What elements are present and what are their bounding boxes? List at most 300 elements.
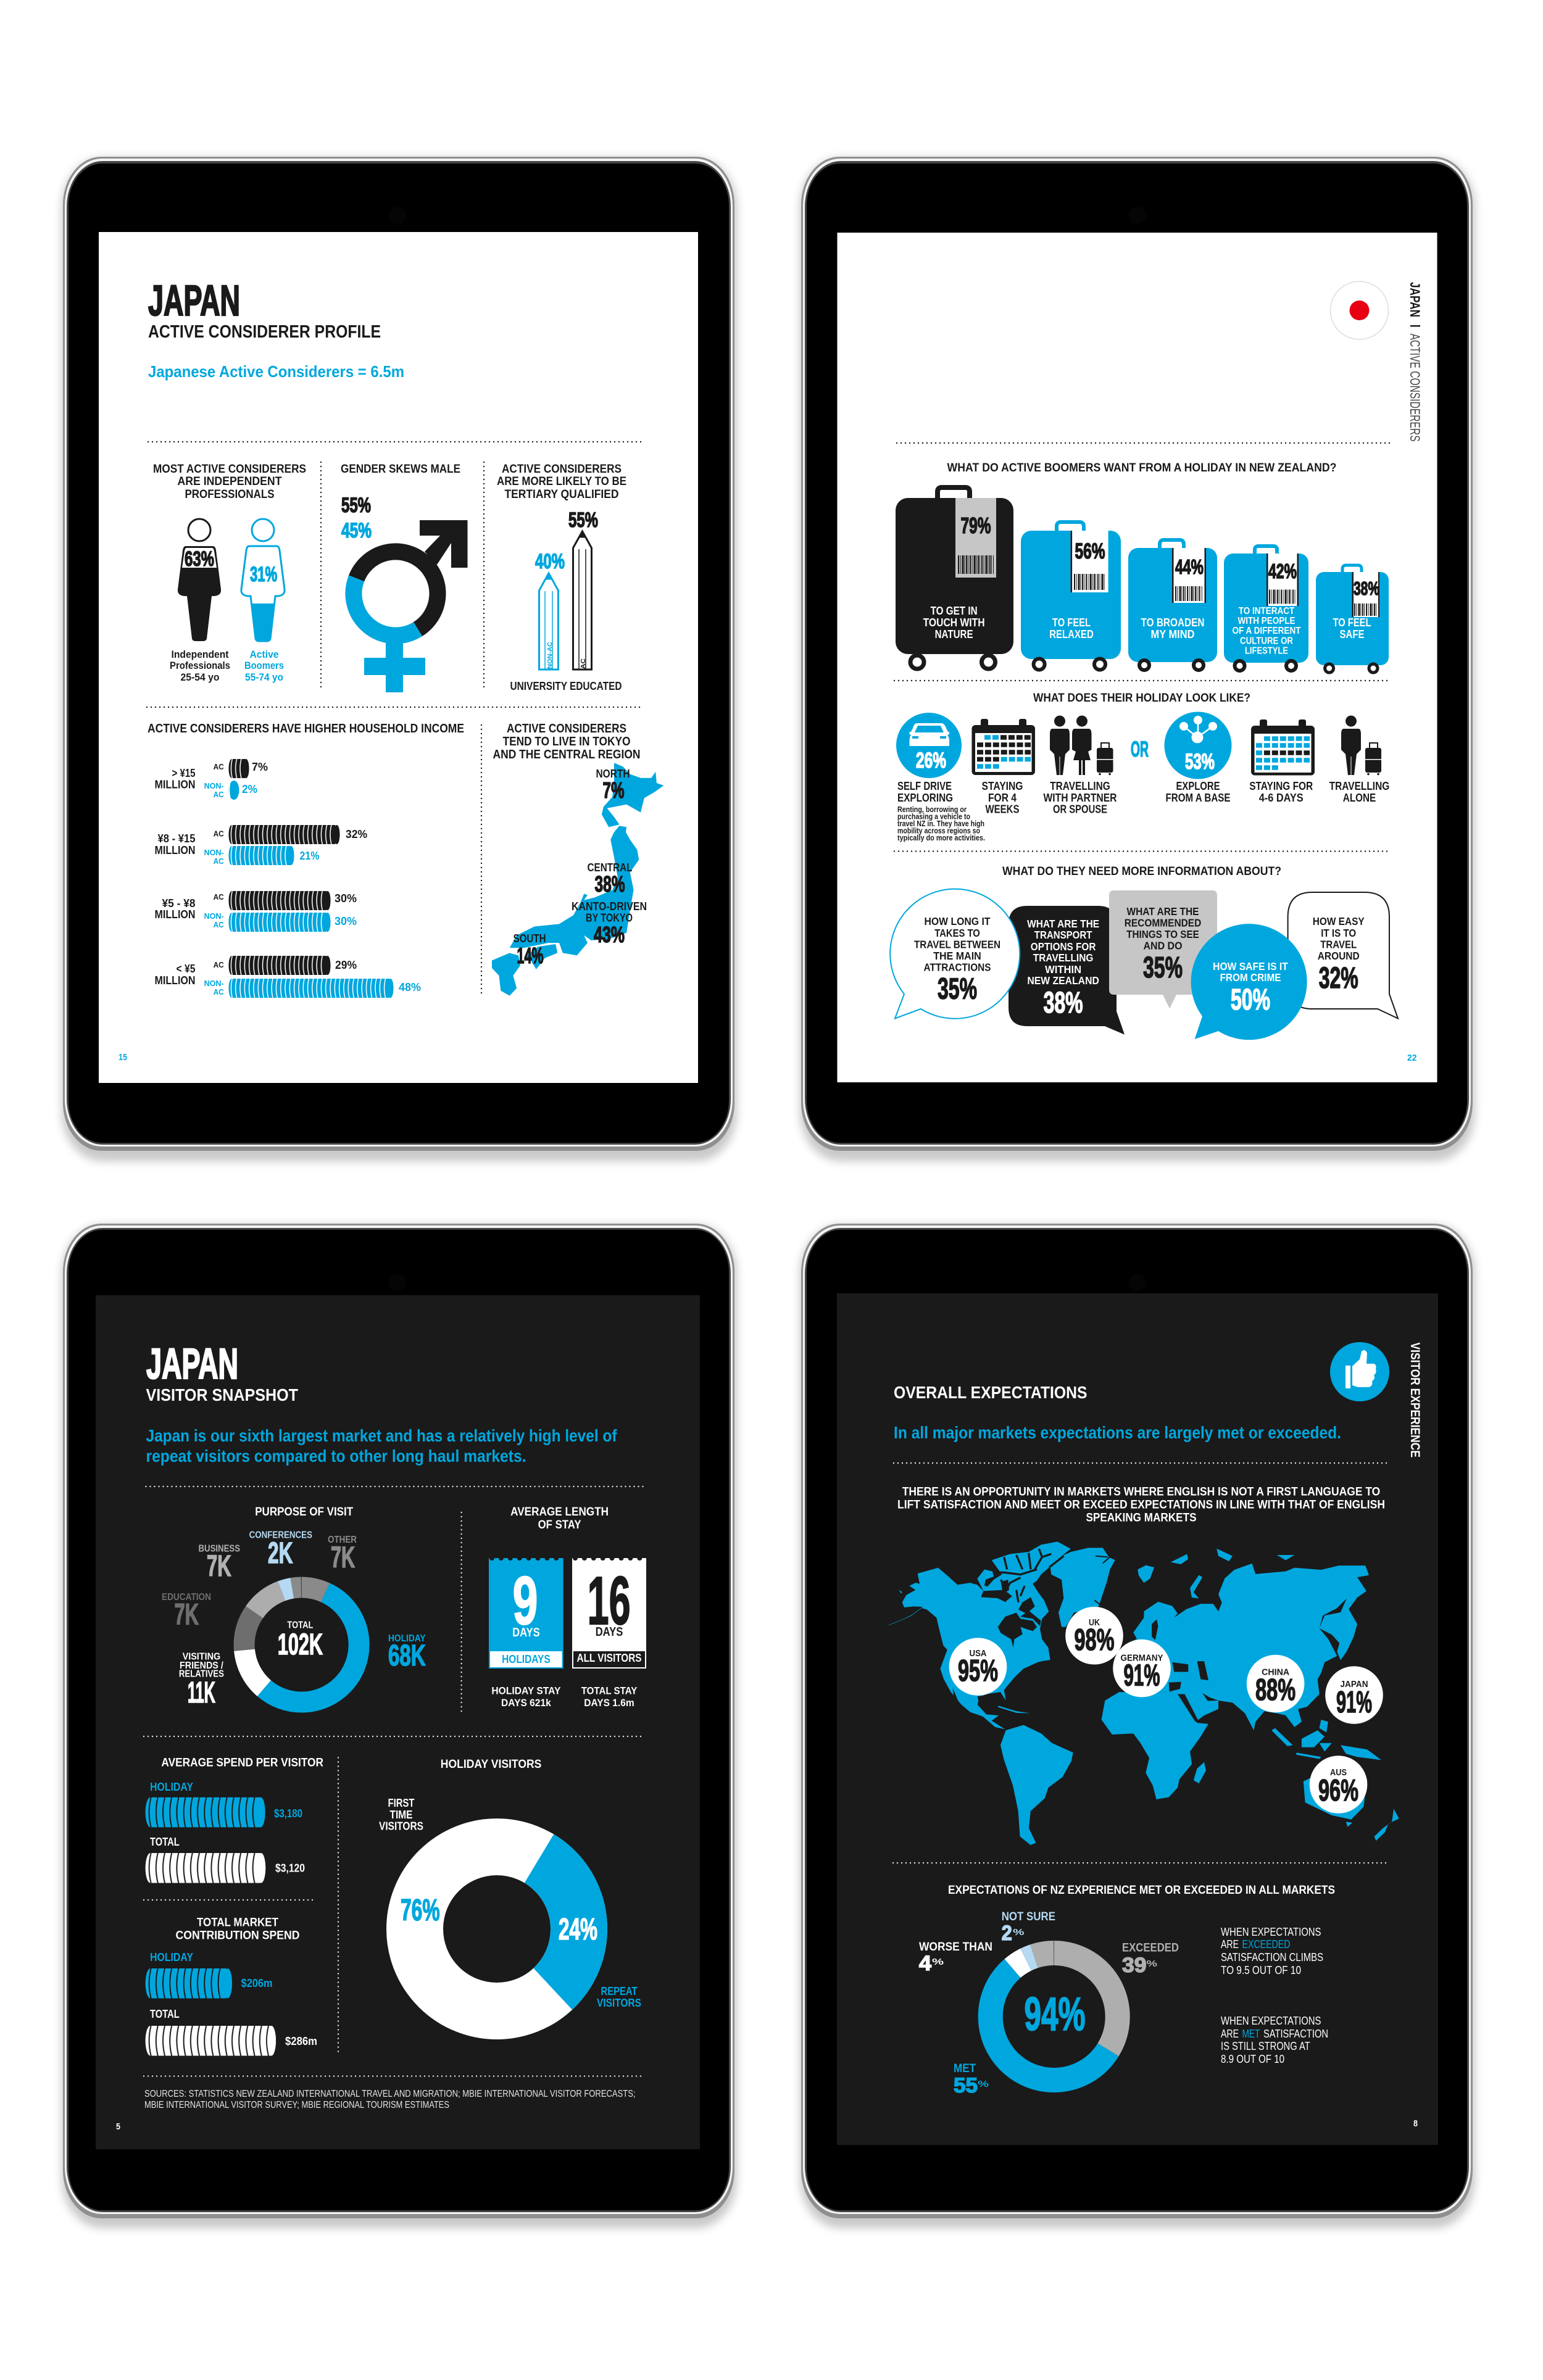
stat: worse than: WORSE THAN bbox=[919, 1941, 992, 1954]
stat: worse than: % bbox=[932, 1957, 944, 1967]
heading: gender: GENDER SKEWS MALE bbox=[341, 462, 460, 476]
speech bubble: transport options 38%: OPTIONS FOR bbox=[1031, 940, 1096, 953]
row: 8 to 15 million bbox=[154, 825, 367, 866]
calendar: holidays 9 days: DAYS bbox=[512, 1626, 540, 1640]
page number: 22 bbox=[1407, 1053, 1417, 1063]
map: Japan bbox=[492, 763, 663, 996]
stat: visiting friends and relatives: RELATIVES bbox=[179, 1669, 224, 1680]
heading: tokyo region: AND THE CENTRAL REGION bbox=[493, 748, 641, 761]
heading: length of stay: OF STAY bbox=[538, 1518, 581, 1532]
label: self drive exploring: typically do more activities. bbox=[897, 834, 985, 842]
stat: 76%: 76% bbox=[401, 1894, 440, 1927]
heading: total market contribution: CONTRIBUTION SPEND bbox=[175, 1929, 300, 1943]
note: exceeded satisfaction: TO 9.5 OUT OF 10 bbox=[1221, 1964, 1301, 1976]
calendar: holidays 9 days bbox=[489, 1558, 564, 1669]
suitcase: safe 38%: 38% bbox=[1354, 578, 1379, 599]
label: active boomers: Active bbox=[249, 649, 279, 660]
suitcase: broaden 44%: MY MIND bbox=[1150, 628, 1195, 641]
row: 8 to 15 million: NON- bbox=[204, 848, 224, 857]
note: met satisfaction: SATISFACTION bbox=[1263, 2028, 1328, 2040]
speech bubble: recommended things 35% bbox=[1109, 890, 1217, 1008]
donut chart: expectations bbox=[991, 1953, 1118, 2080]
note: met satisfaction: MET bbox=[1242, 2028, 1260, 2040]
subtitle: ACTIVE CONSIDERER PROFILE bbox=[148, 322, 381, 342]
icon: self drive car 26%: 26% bbox=[916, 748, 946, 773]
suitcase: interact 42%: OF A DIFFERENT bbox=[1232, 626, 1301, 636]
row: 8 to 15 million: MILLION bbox=[154, 844, 195, 856]
speech bubble: transport options 38%: 38% bbox=[1044, 987, 1083, 1019]
icon: blue pencil: NON-AC bbox=[547, 642, 554, 669]
bar: contribution holiday: $206m bbox=[241, 1977, 273, 1989]
speech bubble: safety 50%: HOW SAFE IS IT bbox=[1213, 960, 1288, 972]
calendar: all visitors 16 days: ALL VISITORS bbox=[576, 1652, 642, 1664]
row: over 15 million: > ¥15 bbox=[172, 767, 195, 779]
label: travelling with partner: OR SPOUSE bbox=[1053, 803, 1107, 816]
label: self drive exploring: Renting, borrowing or bbox=[897, 805, 967, 814]
bar chart: household income bbox=[154, 759, 421, 998]
label: university educated: UNIVERSITY EDUCATED bbox=[510, 680, 622, 692]
marker: Australia: 96% bbox=[1318, 1774, 1358, 1807]
bar: average spend holiday bbox=[146, 1781, 302, 1827]
heading: independent professionals: ARE INDEPENDENT bbox=[178, 475, 282, 488]
calendar: holidays 9 days: HOLIDAYS bbox=[502, 1653, 551, 1665]
icon: solo traveller with suitcase bbox=[1341, 716, 1381, 775]
speech bubble: transport options 38% bbox=[1009, 906, 1125, 1035]
stat: conferences bbox=[249, 1530, 312, 1570]
speech bubble: recommended things 35%: 35% bbox=[1143, 952, 1183, 984]
row: 8 to 15 million: AC bbox=[214, 856, 224, 866]
stat: worse than bbox=[919, 1941, 992, 1975]
label: self drive exploring: travel NZ in. They have high bbox=[897, 819, 984, 828]
marker: Japan: JAPAN bbox=[1341, 1679, 1368, 1690]
speech bubble: recommended things 35%: AND DO bbox=[1143, 939, 1183, 952]
stat: met: 55 bbox=[954, 2074, 978, 2097]
suitcase: interact 42%: CULTURE OR bbox=[1240, 636, 1293, 647]
heading: holiday look: WHAT DOES THEIR HOLIDAY LOOK LIKE? bbox=[1033, 691, 1250, 705]
heading: tokyo region: TEND TO LIVE IN TOKYO bbox=[502, 735, 631, 748]
marker: USA: USA bbox=[969, 1648, 987, 1659]
heading: length of stay: AVERAGE LENGTH bbox=[510, 1505, 609, 1519]
icon: thumbs up bbox=[1330, 1342, 1389, 1401]
note: met satisfaction: WHEN EXPECTATIONS bbox=[1221, 2015, 1321, 2027]
label: total stay days: DAYS 1.6m bbox=[584, 1697, 634, 1709]
speech bubble: easy travel 32%: IT IS TO bbox=[1321, 927, 1356, 939]
heading: tokyo region: ACTIVE CONSIDERERS bbox=[507, 722, 626, 736]
stat: other bbox=[328, 1535, 357, 1574]
suitcase: interact 42%: LIFESTYLE bbox=[1245, 645, 1288, 657]
icon: couple with suitcase bbox=[1050, 716, 1113, 775]
label: holiday stay days: DAYS 621k bbox=[501, 1697, 551, 1709]
row: under 5 million: AC bbox=[214, 987, 224, 997]
bar: average spend holiday: HOLIDAY bbox=[150, 1781, 193, 1793]
heading: tertiary qualified bbox=[497, 462, 626, 501]
note: exceeded satisfaction bbox=[1221, 1926, 1323, 1976]
intro text: Japanese Active Considerers = 6.5m bbox=[148, 362, 404, 381]
stat: business bbox=[199, 1544, 240, 1583]
intro text bbox=[146, 1426, 617, 1466]
label: independent professionals: 25-54 yo bbox=[180, 671, 220, 683]
speech bubble: transport options 38%: TRAVELLING bbox=[1033, 952, 1093, 964]
marker: China: CHINA bbox=[1262, 1667, 1289, 1677]
note: exceeded satisfaction: SATISFACTION CLIMBS bbox=[1221, 1951, 1323, 1963]
suitcase: broaden 44% bbox=[1128, 540, 1217, 670]
row: over 15 million: NON- bbox=[204, 781, 224, 790]
heading: tertiary qualified: ACTIVE CONSIDERERS bbox=[502, 462, 622, 476]
heading: purpose of visit: PURPOSE OF VISIT bbox=[255, 1505, 353, 1519]
heading: tertiary qualified: TERTIARY QUALIFIED bbox=[505, 487, 618, 501]
page number: 8 bbox=[1413, 2118, 1418, 2129]
speech bubble: easy travel 32%: TRAVEL bbox=[1320, 938, 1357, 950]
icon: self drive car 26% bbox=[896, 713, 962, 778]
bar: contribution total bbox=[146, 2008, 317, 2056]
label: first time visitors: VISITORS bbox=[379, 1820, 423, 1833]
row: over 15 million: AC bbox=[214, 790, 224, 799]
bar: contribution holiday: HOLIDAY bbox=[150, 1951, 193, 1963]
side label bbox=[1407, 282, 1423, 442]
heading: total market contribution: TOTAL MARKET bbox=[197, 1916, 278, 1930]
label: self drive exploring bbox=[897, 780, 985, 842]
label: self drive exploring: SELF DRIVE bbox=[897, 780, 952, 792]
suitcase: broaden 44%: TO BROADEN bbox=[1141, 616, 1205, 629]
icon: explore from base 53%: 53% bbox=[1185, 750, 1215, 774]
donut chart: holiday visitors bbox=[415, 1847, 579, 2011]
row: 5 to 8 million: ¥5 - ¥8 bbox=[162, 897, 195, 910]
stat: conferences: CONFERENCES bbox=[249, 1530, 312, 1541]
speech bubble: travel time 35%: THE MAIN bbox=[933, 950, 981, 962]
label: explore from a base bbox=[1165, 780, 1231, 804]
label: travelling with partner bbox=[1043, 780, 1117, 816]
marker: Australia bbox=[1310, 1756, 1367, 1814]
label: OR: OR bbox=[1131, 737, 1149, 761]
stat: not sure: % bbox=[1013, 1927, 1025, 1938]
label: active boomers bbox=[244, 649, 284, 683]
icon: calendar 4 weeks bbox=[971, 719, 1035, 775]
speech bubble: travel time 35%: 35% bbox=[938, 972, 977, 1006]
marker: Germany bbox=[1113, 1640, 1171, 1697]
speech bubble: travel time 35% bbox=[890, 889, 1020, 1019]
title: JAPAN bbox=[146, 1340, 238, 1388]
suitcase: broaden 44%: 44% bbox=[1175, 555, 1204, 578]
label: independent professionals: Professionals bbox=[170, 660, 230, 671]
heading: independent professionals: PROFESSIONALS bbox=[185, 487, 274, 501]
row: 5 to 8 million: AC bbox=[214, 920, 224, 929]
label: active boomers: 55-74 yo bbox=[245, 671, 283, 683]
heading: holiday visitors: HOLIDAY VISITORS bbox=[441, 1757, 541, 1771]
stat: visiting friends and relatives bbox=[179, 1652, 224, 1709]
icon: blue pencil bbox=[539, 573, 558, 670]
stat: met bbox=[954, 2062, 989, 2097]
label: explore from a base: FROM A BASE bbox=[1165, 792, 1231, 804]
stat: business: 7K bbox=[207, 1550, 231, 1583]
calendar: all visitors 16 days: DAYS bbox=[596, 1625, 623, 1639]
stat: not sure bbox=[1002, 1910, 1055, 1945]
label: active boomers: Boomers bbox=[244, 660, 284, 671]
page number: 15 bbox=[119, 1052, 127, 1063]
stat: conferences: 2K bbox=[268, 1537, 293, 1570]
label: independent professionals: Independent bbox=[172, 649, 229, 660]
label: self drive exploring: mobility across regions so bbox=[897, 826, 980, 835]
stat: education: EDUCATION bbox=[162, 1592, 211, 1603]
suitcase: nature 79%: NATURE bbox=[935, 628, 973, 641]
icon: explore from base 53% bbox=[1164, 712, 1232, 779]
icon: black person 63%: 63% bbox=[185, 547, 214, 571]
note: met satisfaction: IS STILL STRONG AT bbox=[1221, 2040, 1310, 2052]
speech bubble: safety 50%: 50% bbox=[1231, 984, 1270, 1016]
stat: 24%: 24% bbox=[559, 1913, 597, 1946]
label: staying 4-6 days: 4-6 DAYS bbox=[1259, 792, 1304, 804]
label: explore from a base: EXPLORE bbox=[1176, 780, 1220, 792]
note: met satisfaction: 8.9 OUT OF 10 bbox=[1221, 2053, 1284, 2065]
page number: 5 bbox=[116, 2121, 120, 2132]
bar: contribution total: $286m bbox=[285, 2035, 317, 2047]
map label: kanto bbox=[572, 900, 647, 947]
stat: education: 7K bbox=[174, 1598, 199, 1632]
suitcase: nature 79% bbox=[896, 487, 1013, 669]
note: met satisfaction bbox=[1221, 2015, 1328, 2065]
heading: total market contribution bbox=[175, 1916, 300, 1943]
heading: independent professionals bbox=[153, 462, 306, 501]
note: exceeded satisfaction: WHEN EXPECTATIONS bbox=[1221, 1926, 1321, 1938]
suitcase: safe 38%: TO FEEL bbox=[1333, 616, 1371, 629]
panel: tablet overall expectations bbox=[800, 1224, 1475, 2228]
label: travelling alone: TRAVELLING bbox=[1329, 780, 1389, 792]
suitcase: interact 42%: 42% bbox=[1268, 560, 1297, 583]
heading: what boomers want: WHAT DO ACTIVE BOOMERS WANT FROM A HOLIDAY IN NEW ZEALAND? bbox=[947, 461, 1337, 475]
speech bubble: transport options 38%: WHAT ARE THE bbox=[1027, 918, 1099, 930]
icon: blue person 31%: 31% bbox=[250, 563, 277, 586]
speech bubble: recommended things 35%: RECOMMENDED bbox=[1125, 917, 1201, 929]
speech bubble: transport options 38%: NEW ZEALAND bbox=[1027, 974, 1099, 987]
stat: business: BUSINESS bbox=[199, 1544, 240, 1554]
row: over 15 million: 7% bbox=[252, 761, 268, 773]
heading: independent professionals: MOST ACTIVE CONSIDERERS bbox=[153, 462, 306, 476]
suitcase: interact 42%: TO INTERACT bbox=[1239, 606, 1294, 616]
map label: central: 38% bbox=[595, 871, 625, 897]
row: 8 to 15 million: 21% bbox=[300, 850, 320, 862]
row: under 5 million bbox=[154, 956, 421, 998]
bar: average spend holiday: $3,180 bbox=[274, 1807, 302, 1820]
suitcase: relaxed 56%: RELAXED bbox=[1049, 628, 1094, 641]
intro text: In all major markets expectations are largely met or exceeded. bbox=[894, 1423, 1341, 1442]
row: under 5 million: < ¥5 bbox=[177, 963, 195, 975]
marker: China bbox=[1247, 1655, 1304, 1712]
label: first time visitors bbox=[379, 1797, 423, 1833]
bar: average spend total: $3,120 bbox=[275, 1862, 305, 1875]
icon: blue person 31% bbox=[241, 519, 285, 641]
speech bubble: safety 50%: FROM CRIME bbox=[1220, 971, 1281, 984]
panel: tablet active consumer profile bbox=[62, 157, 737, 1161]
row: 5 to 8 million: MILLION bbox=[154, 908, 195, 921]
map label: kanto: KANTO-DRIVEN bbox=[572, 900, 647, 913]
heading: household income: ACTIVE CONSIDERERS HAVE HIGHER HOUSEHOLD INCOME bbox=[148, 722, 464, 736]
stat: visiting friends and relatives: FRIENDS / bbox=[180, 1661, 223, 1671]
marker: Japan bbox=[1325, 1666, 1383, 1724]
suitcase: relaxed 56% bbox=[1021, 522, 1121, 670]
stat: exceeded: % bbox=[1147, 1959, 1157, 1969]
speech bubble: easy travel 32%: 32% bbox=[1319, 962, 1358, 995]
label: total stay days: TOTAL STAY bbox=[581, 1685, 638, 1697]
suitcase: nature 79%: TOUCH WITH bbox=[923, 616, 985, 629]
stat: education bbox=[162, 1592, 211, 1632]
heading: average spend: AVERAGE SPEND PER VISITOR bbox=[161, 1756, 323, 1769]
map label: central bbox=[588, 861, 632, 897]
bar: contribution holiday bbox=[146, 1951, 273, 1998]
speech bubble: easy travel 32%: AROUND bbox=[1318, 950, 1360, 962]
suitcase: nature 79%: TO GET IN bbox=[931, 605, 978, 617]
map label: north: NORTH bbox=[596, 768, 630, 780]
stat: exceeded bbox=[1122, 1942, 1179, 1977]
marker: Japan: 91% bbox=[1336, 1686, 1372, 1719]
speech bubble: easy travel 32% bbox=[1288, 892, 1398, 1018]
stat: female 45%: 45% bbox=[341, 519, 372, 542]
row: under 5 million: MILLION bbox=[154, 974, 195, 987]
speech bubble: transport options 38%: WITHIN bbox=[1045, 963, 1081, 976]
marker: USA: 95% bbox=[958, 1654, 998, 1688]
row: under 5 million: 29% bbox=[335, 959, 357, 971]
marker: Germany: 91% bbox=[1123, 1659, 1160, 1693]
label: self drive exploring: purchasing a vehicle to bbox=[897, 813, 970, 821]
label: repeat visitors: VISITORS bbox=[597, 1997, 641, 2009]
intro text: repeat visitors compared to other long haul markets. bbox=[146, 1446, 526, 1466]
calendar: all visitors 16 days: 16 bbox=[588, 1563, 631, 1639]
subtitle: VISITOR SNAPSHOT bbox=[146, 1385, 298, 1404]
icon: gender symbol bbox=[354, 520, 468, 692]
paragraph: opportunity: THERE IS AN OPPORTUNITY IN MARKETS WHERE ENGLISH IS NOT A FIRST LANGUAGE TO bbox=[902, 1485, 1380, 1499]
label: holiday stay days bbox=[491, 1685, 561, 1709]
panel: tablet visitor snapshot bbox=[62, 1224, 737, 2228]
icon: calendar 4-6 days bbox=[1251, 719, 1315, 775]
map label: south: 14% bbox=[517, 943, 543, 968]
row: 5 to 8 million bbox=[154, 891, 357, 932]
donut centre: total: 102K bbox=[278, 1628, 323, 1661]
label: travelling with partner: TRAVELLING bbox=[1050, 780, 1110, 792]
map label: kanto: 43% bbox=[594, 922, 625, 947]
label: staying 4 weeks: FOR 4 bbox=[988, 792, 1017, 804]
map: world bbox=[889, 1541, 1399, 1845]
bar: average spend total bbox=[146, 1836, 305, 1883]
note: met satisfaction: ARE bbox=[1221, 2028, 1239, 2040]
label: travelling alone bbox=[1329, 780, 1389, 804]
label: staying 4 weeks: WEEKS bbox=[985, 803, 1020, 816]
suitcase: safe 38% bbox=[1316, 565, 1389, 673]
marker: UK: 98% bbox=[1074, 1623, 1115, 1657]
title: JAPAN bbox=[148, 276, 240, 325]
row: 5 to 8 million: 30% bbox=[335, 915, 357, 927]
icon: black pencil bbox=[573, 531, 591, 670]
map label: south bbox=[514, 932, 546, 968]
speech bubble: recommended things 35%: THINGS TO SEE bbox=[1126, 928, 1199, 940]
row: under 5 million: NON- bbox=[204, 979, 224, 988]
speech bubble: recommended things 35%: WHAT ARE THE bbox=[1127, 905, 1199, 918]
label: first time visitors: TIME bbox=[390, 1809, 412, 1821]
speech bubble: easy travel 32%: HOW EASY bbox=[1313, 915, 1365, 927]
map label: north bbox=[596, 768, 630, 803]
donut chart: purpose of visit bbox=[244, 1587, 359, 1702]
side label: VISITOR EXPERIENCE bbox=[1408, 1343, 1422, 1457]
note: exceeded satisfaction: ARE bbox=[1221, 1938, 1239, 1951]
label: travelling alone: ALONE bbox=[1343, 792, 1376, 804]
stat: holiday: HOLIDAY bbox=[388, 1633, 426, 1644]
stat: AC 55%: 55% bbox=[568, 508, 598, 532]
suitcase: nature 79%: 79% bbox=[960, 513, 991, 538]
row: 8 to 15 million: ¥8 - ¥15 bbox=[158, 832, 195, 845]
icon: black pencil: AC bbox=[580, 658, 587, 669]
heading: OVERALL EXPECTATIONS bbox=[894, 1383, 1088, 1402]
stat: visiting friends and relatives: 11K bbox=[188, 1677, 215, 1709]
row: over 15 million: MILLION bbox=[154, 779, 195, 791]
stat: other: 7K bbox=[331, 1541, 355, 1574]
label: first time visitors: FIRST bbox=[388, 1797, 415, 1809]
label: staying 4 weeks: STAYING bbox=[981, 780, 1023, 792]
map label: central: CENTRAL bbox=[588, 861, 632, 874]
stat: 94%: 94% bbox=[1025, 1988, 1085, 2041]
stat: met: MET bbox=[954, 2062, 976, 2075]
row: 8 to 15 million: 32% bbox=[346, 828, 367, 840]
side label: ACTIVE CONSIDERERS bbox=[1407, 334, 1423, 442]
stat: not sure: 2 bbox=[1002, 1922, 1012, 1945]
stat: not sure: NOT SURE bbox=[1002, 1910, 1055, 1923]
speech bubble: travel time 35%: TAKES TO bbox=[934, 927, 980, 939]
stat: holiday bbox=[388, 1633, 426, 1672]
row: 5 to 8 million: 30% bbox=[335, 892, 357, 905]
row: 5 to 8 million: NON- bbox=[204, 911, 224, 921]
paragraph: opportunity bbox=[897, 1485, 1385, 1525]
map label: south: SOUTH bbox=[514, 932, 546, 945]
row: over 15 million bbox=[154, 759, 268, 800]
icon: black person 63% bbox=[178, 519, 221, 641]
icon: Japanese flag bbox=[1331, 281, 1389, 339]
calendar: holidays 9 days: 9 bbox=[512, 1563, 538, 1639]
suitcase: interact 42% bbox=[1224, 546, 1308, 671]
row: 5 to 8 million: AC bbox=[214, 892, 224, 902]
stat: worse than: 4 bbox=[919, 1952, 931, 1975]
stat: other: OTHER bbox=[328, 1535, 357, 1545]
heading: length of stay bbox=[510, 1505, 609, 1532]
sources: SOURCES: STATISTICS NEW ZEALAND INTERNATIONAL TRAVEL AND MIGRATION; MBIE INTERNATIONAL VISITOR FORECASTS; bbox=[144, 2089, 636, 2099]
row: under 5 million: 48% bbox=[399, 981, 421, 993]
stat: non-AC 40%: 40% bbox=[535, 550, 565, 573]
label: repeat visitors bbox=[597, 1985, 641, 2009]
marker: UK bbox=[1065, 1607, 1123, 1665]
speech bubble: transport options 38%: TRANSPORT bbox=[1034, 929, 1092, 941]
heading: tokyo region bbox=[493, 722, 641, 761]
label: holiday stay days: HOLIDAY STAY bbox=[491, 1685, 561, 1697]
donut centre: total: TOTAL bbox=[287, 1620, 314, 1631]
bar: average spend total: TOTAL bbox=[150, 1836, 180, 1848]
suitcase: relaxed 56%: 56% bbox=[1075, 539, 1105, 563]
donut centre: total bbox=[278, 1620, 323, 1661]
side label: JAPAN bbox=[1407, 282, 1423, 317]
map label: kanto: BY TOKYO bbox=[586, 912, 633, 924]
stat: visiting friends and relatives: VISITING bbox=[183, 1652, 220, 1662]
stat: exceeded: 39 bbox=[1122, 1954, 1147, 1977]
note: exceeded satisfaction: EXCEEDED bbox=[1242, 1938, 1290, 1951]
row: under 5 million: AC bbox=[214, 960, 224, 969]
marker: China: 88% bbox=[1255, 1673, 1296, 1707]
sources bbox=[144, 2089, 636, 2110]
label: self drive exploring: EXPLORING bbox=[897, 792, 953, 804]
bar: contribution total: TOTAL bbox=[150, 2008, 180, 2020]
map label: north: 7% bbox=[602, 777, 625, 803]
marker: UK: UK bbox=[1089, 1617, 1100, 1628]
label: travelling with partner: WITH PARTNER bbox=[1043, 792, 1117, 804]
suitcase: relaxed 56%: TO FEEL bbox=[1052, 616, 1091, 629]
label: repeat visitors: REPEAT bbox=[601, 1985, 637, 1997]
row: 8 to 15 million: AC bbox=[214, 829, 224, 838]
stat: exceeded: EXCEEDED bbox=[1122, 1942, 1179, 1955]
heading: expectations of NZ experience: EXPECTATIONS OF NZ EXPERIENCE MET OR EXCEEDED IN ALL MARKETS bbox=[948, 1883, 1335, 1897]
row: over 15 million: 2% bbox=[242, 783, 257, 795]
